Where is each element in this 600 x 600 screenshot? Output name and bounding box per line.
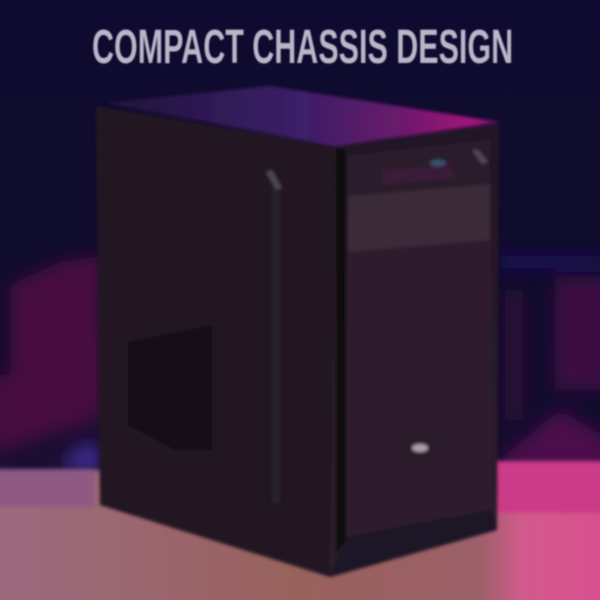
front drive bay bbox=[348, 184, 490, 252]
front io red strip bbox=[382, 166, 455, 184]
left magenta furniture bbox=[0, 255, 105, 475]
right furniture glow bbox=[500, 255, 600, 470]
title: COMPACT CHASSIS DESIGN bbox=[92, 21, 513, 74]
corner edge bbox=[336, 148, 346, 555]
front io button bbox=[472, 150, 488, 164]
computer case bbox=[96, 86, 500, 577]
floor bbox=[0, 461, 600, 600]
bottom front shadow bbox=[330, 510, 497, 577]
ridge highlight bbox=[266, 170, 282, 190]
front panel lower face bbox=[347, 185, 491, 535]
front panel top band bbox=[347, 140, 490, 196]
case side panel bbox=[96, 106, 335, 577]
power button logo bbox=[412, 444, 428, 452]
power button ring bbox=[398, 425, 442, 469]
front io blue light bbox=[430, 160, 446, 166]
side panel ridge bbox=[272, 188, 280, 503]
case front panel bbox=[330, 124, 499, 577]
side panel vent bbox=[128, 325, 212, 450]
case top panel bbox=[104, 86, 500, 146]
